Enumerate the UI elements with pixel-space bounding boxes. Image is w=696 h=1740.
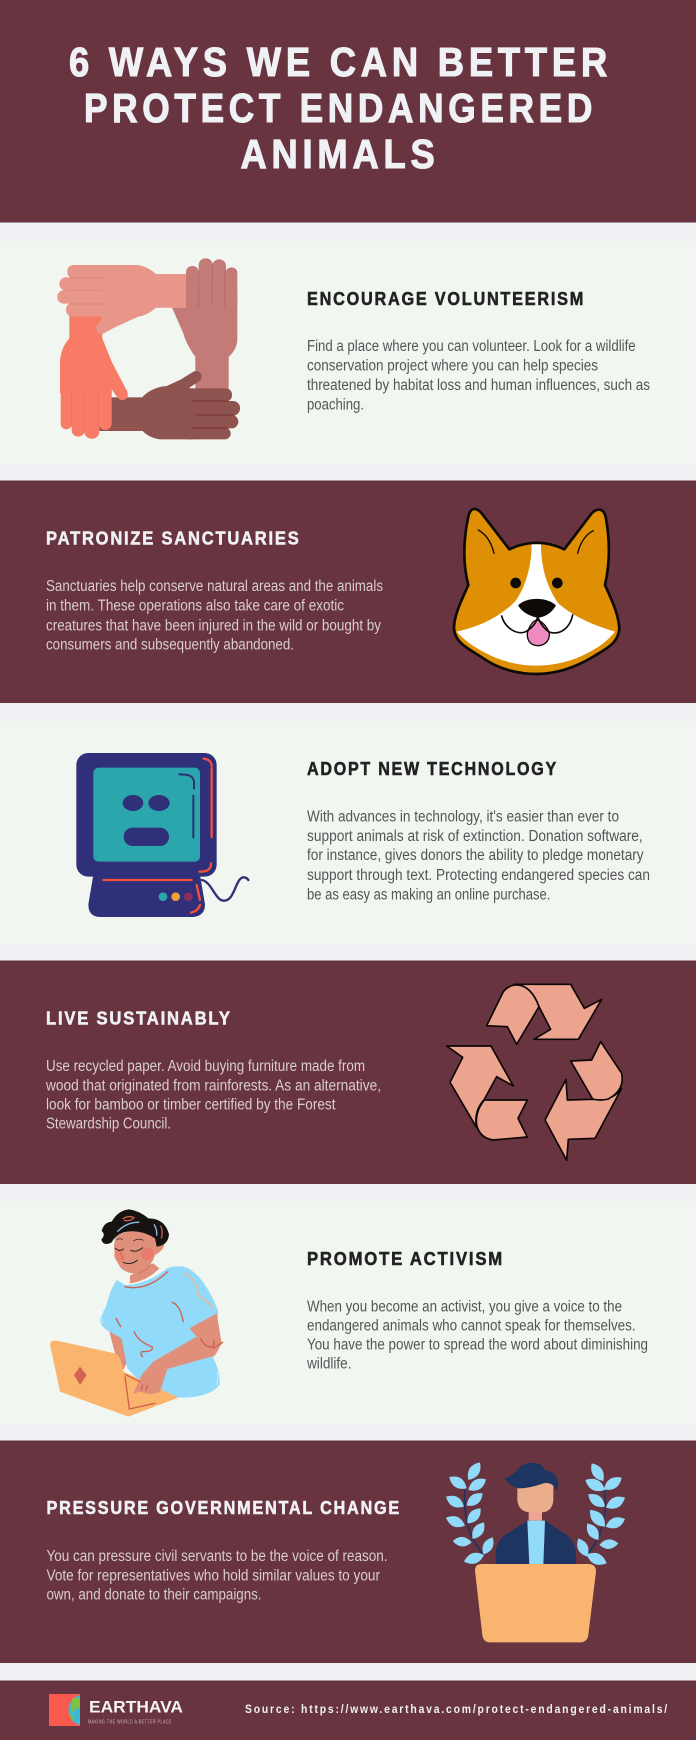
- icon: corgi face: [454, 509, 619, 674]
- heading: ADOPT NEW TECHNOLOGY: [307, 758, 558, 779]
- heading: PRESSURE GOVERNMENTAL CHANGE: [46, 1497, 401, 1518]
- text block: be as easy as making an online purchase.: [307, 886, 550, 903]
- text block: poaching.: [307, 396, 364, 413]
- text block: [46, 1548, 388, 1603]
- text block: You can pressure civil servants to be the voice of reason.: [46, 1548, 388, 1565]
- heading: PATRONIZE SANCTUARIES: [46, 528, 300, 549]
- title: ANIMALS: [240, 131, 440, 177]
- heading: LIVE SUSTAINABLY: [46, 1008, 232, 1029]
- panel: encourage volunteerism: [0, 241, 696, 464]
- logo: Earthava: EARTHAVA: [89, 1699, 183, 1717]
- text block: own, and donate to their campaigns.: [46, 1586, 262, 1603]
- heading: ENCOURAGE VOLUNTEERISM: [307, 288, 585, 309]
- icon: person using laptop: [50, 1209, 223, 1417]
- panel: live sustainably: [0, 960, 696, 1184]
- text block: [45, 1058, 381, 1132]
- text block: creatures that have been injured in the wild or bought by: [46, 617, 381, 634]
- text block: support through text. Protecting endangered species can: [307, 867, 650, 884]
- text block: Vote for representatives who hold similar values to your: [46, 1567, 380, 1584]
- title: 6 WAYS WE CAN BETTER: [69, 39, 612, 85]
- icon: speaker at podium with laurels: [443, 1459, 627, 1642]
- panel: pressure governmental change: [0, 1440, 696, 1663]
- header panel: [0, 0, 696, 222]
- text block: threatened by habitat loss and human influences, such as: [307, 377, 650, 394]
- heading: PROMOTE ACTIVISM: [307, 1248, 504, 1269]
- text block: Use recycled paper. Avoid buying furniture made from: [46, 1058, 365, 1075]
- panel: promote activism: [0, 1201, 696, 1424]
- text block: Sanctuaries help conserve natural areas and the animals: [46, 578, 383, 595]
- icon: recycling arrows: [447, 984, 622, 1160]
- text block: Stewardship Council.: [46, 1115, 171, 1132]
- text block: Find a place where you can volunteer. Look for a wildlife: [307, 338, 636, 355]
- panel: adopt new technology: [0, 721, 696, 944]
- logo: Earthava: [49, 1694, 183, 1726]
- icon: retro computer: [76, 753, 248, 917]
- logo: Earthava: MAKING THE WORLD A BETTER PLACE: [88, 1720, 172, 1726]
- text block: in them. These operations also take care of exotic: [46, 597, 344, 614]
- text block: wood that originated from rainforests. As an alternative,: [45, 1077, 381, 1094]
- text block: [46, 578, 383, 653]
- panel: patronize sanctuaries: [0, 480, 696, 703]
- text block: wildlife.: [306, 1356, 352, 1373]
- title: PROTECT ENDANGERED: [84, 85, 597, 131]
- text block: You have the power to spread the word about diminishing: [307, 1337, 648, 1354]
- text block: [306, 1299, 648, 1373]
- text block: [307, 809, 650, 903]
- text block: When you become an activist, you give a voice to the: [307, 1299, 622, 1316]
- text block: With advances in technology, it's easier than ever to: [307, 809, 619, 826]
- text block: support animals at risk of extinction. Donation software,: [307, 828, 643, 845]
- footer panel: [0, 1680, 696, 1740]
- text block: [307, 338, 650, 413]
- text block: consumers and subsequently abandoned.: [46, 636, 294, 653]
- text block: look for bamboo or timber certified by the Forest: [46, 1096, 336, 1113]
- icon: four linked hands: [57, 258, 240, 439]
- text block: for instance, gives donors the ability to pledge monetary: [307, 847, 644, 864]
- text block: conservation project where you can help species: [307, 357, 598, 374]
- title: [69, 39, 612, 177]
- text block: endangered animals who cannot speak for themselves.: [307, 1318, 636, 1335]
